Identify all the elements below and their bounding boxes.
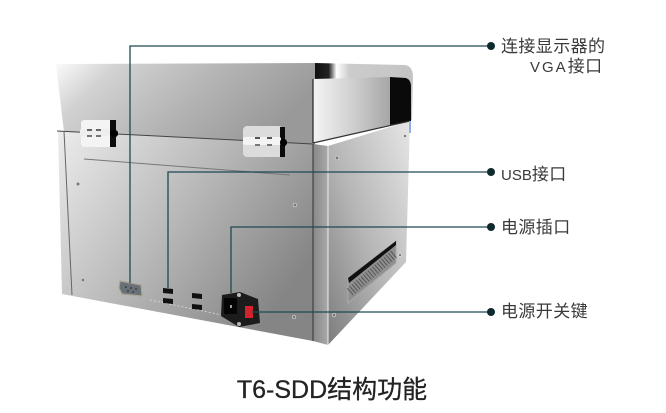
panel: lid front <box>313 77 391 143</box>
power socket and switch <box>221 292 260 327</box>
panel seams <box>57 131 328 345</box>
leader lines <box>130 46 491 312</box>
label: USB: USB接口 <box>501 165 567 184</box>
panel: lid dark recess <box>390 77 411 125</box>
label: power socket: 电源插口 <box>501 218 571 237</box>
VGA port <box>119 281 142 296</box>
line: VGA <box>130 46 491 283</box>
label: VGA: 连接显示器的 <box>501 37 605 56</box>
line: power socket <box>231 227 491 293</box>
panel: right side <box>328 121 410 345</box>
cabinet <box>56 63 413 345</box>
panel: lid top edge <box>315 63 413 125</box>
label: VGA <box>501 37 605 76</box>
line: USB <box>168 172 491 288</box>
ventilation grille <box>348 241 396 303</box>
screws <box>76 134 406 319</box>
label: power switch: 电源开关键 <box>501 302 588 321</box>
label: VGA: VGA接口 <box>530 57 602 76</box>
panel: lid back <box>56 63 315 145</box>
hinge: right <box>243 126 287 157</box>
callout dots <box>487 42 495 316</box>
panel: rear body <box>58 131 313 341</box>
USB ports <box>163 288 202 310</box>
hinge: left <box>80 120 118 147</box>
title: T6-SDD结构功能 <box>237 376 427 404</box>
red switch <box>245 306 253 318</box>
line: power switch <box>252 311 491 313</box>
panel: corner strip <box>313 144 328 345</box>
